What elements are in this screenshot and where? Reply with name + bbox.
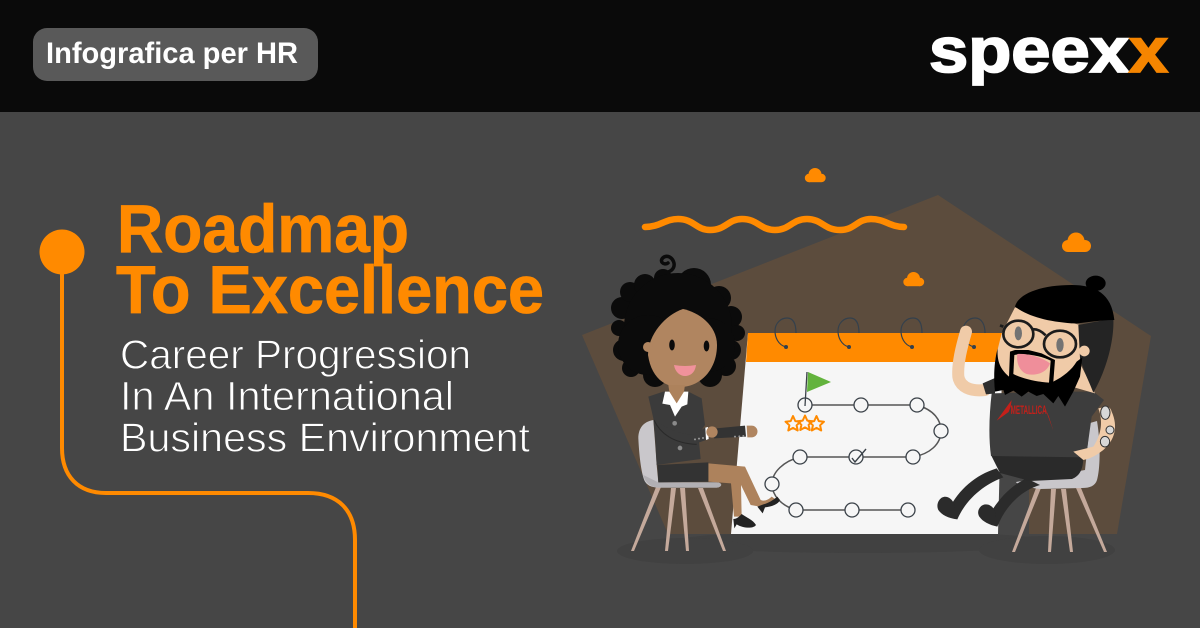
neck	[668, 385, 685, 403]
band logo	[997, 400, 1053, 431]
calendar	[731, 318, 1029, 534]
orange timeline connector	[40, 230, 355, 628]
subtitle: Business Environment	[120, 414, 531, 460]
beard	[994, 348, 1082, 407]
floor shadows	[617, 531, 1115, 564]
illustration	[582, 168, 1151, 564]
flag	[805, 372, 831, 406]
check mark	[852, 449, 866, 462]
woman	[611, 256, 780, 551]
jacket buttons	[672, 421, 682, 450]
logo: speexx: speex	[929, 16, 1129, 86]
badge: Infografica per HR	[33, 28, 318, 81]
mouth	[674, 365, 696, 376]
sleeve	[983, 378, 995, 394]
title	[116, 192, 544, 328]
title: Roadmap	[117, 192, 409, 267]
title: To Excellence	[116, 253, 544, 328]
badge: Infografica per HR: Infografica per HR	[46, 37, 298, 70]
pants	[991, 455, 1083, 481]
stars	[786, 416, 824, 430]
subtitle: In An International	[120, 373, 454, 419]
far arm	[714, 426, 757, 438]
glasses	[1000, 321, 1076, 357]
subtitle	[120, 332, 531, 460]
eyes	[1015, 326, 1064, 352]
mouth	[1017, 354, 1050, 375]
face	[648, 309, 717, 387]
chair shell	[638, 420, 721, 488]
chair	[1012, 421, 1107, 552]
bun	[1086, 276, 1106, 291]
legs	[708, 463, 777, 517]
near arm	[654, 420, 718, 444]
eyes	[669, 340, 709, 352]
hair top	[1015, 285, 1114, 323]
ear	[643, 342, 653, 352]
brown pentagon backdrop	[582, 195, 1151, 534]
band logo: METALLICA	[1011, 403, 1047, 417]
seat shading	[643, 475, 721, 488]
skirt	[657, 462, 708, 482]
calendar rings	[775, 318, 985, 349]
neck and face	[995, 307, 1095, 393]
body	[638, 385, 780, 528]
legs and shoes	[937, 468, 1040, 527]
shirt	[989, 392, 1104, 457]
chair legs	[631, 487, 726, 551]
cloud: middle	[903, 272, 924, 286]
cloud: top	[805, 168, 826, 182]
subtitle: Career Progression	[120, 332, 471, 378]
head	[994, 276, 1114, 407]
man	[937, 276, 1115, 552]
logo: speexx: x	[1129, 16, 1168, 86]
jacket	[648, 392, 705, 465]
chin	[1013, 354, 1051, 383]
torso and arms	[958, 332, 1115, 460]
shoes	[733, 497, 780, 528]
shirt collar	[662, 392, 688, 417]
hair side	[1078, 318, 1113, 393]
roadmap path	[765, 372, 948, 517]
raised arm	[958, 332, 985, 390]
header bar	[0, 0, 1200, 112]
tattoos	[1100, 406, 1114, 447]
cloud: right	[1062, 232, 1091, 252]
ear	[1079, 346, 1090, 356]
wavy line	[645, 219, 904, 230]
tattooed arm	[1073, 407, 1115, 460]
calendar shadow strip	[995, 470, 1029, 534]
hair	[611, 256, 745, 387]
